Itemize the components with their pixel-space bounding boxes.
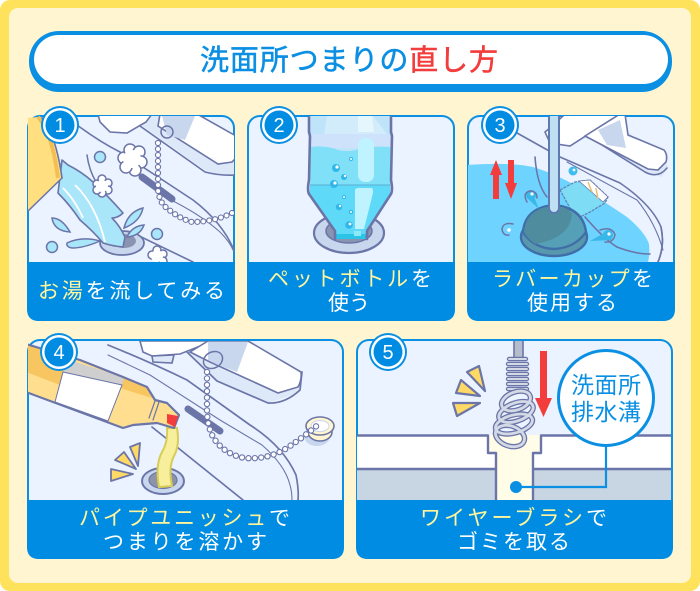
down arrow (535, 351, 552, 417)
caption text: ラバーカップを (492, 268, 653, 291)
caption band (27, 500, 344, 559)
caption band (467, 262, 675, 321)
badge 3: 3 (494, 115, 506, 137)
caption band (27, 262, 235, 321)
panel 1: pour hot water (27, 114, 236, 321)
caption text: つまりを溶かす (103, 531, 267, 554)
badge 5: 5 (382, 342, 394, 364)
caption text: お湯を流してみる (38, 280, 225, 303)
drain (142, 468, 184, 494)
callout: washbasin drain: 洗面所 (571, 372, 641, 398)
badge 4: 4 (53, 342, 65, 364)
badge 2: 2 (273, 115, 285, 137)
title banner (29, 31, 672, 92)
callout: washbasin drain: 排水溝 (571, 399, 641, 425)
wire brush (492, 340, 536, 451)
spark marks (453, 366, 485, 416)
foam (93, 144, 167, 265)
faucet (140, 341, 302, 403)
water splashes (52, 218, 70, 232)
panel 4: dissolve with pipe cleaner (26, 340, 344, 559)
caption text: ワイヤーブラシで (420, 507, 607, 530)
plug chain (158, 126, 234, 222)
plug (304, 417, 334, 446)
plunger cup (520, 229, 588, 258)
callout: washbasin drain (558, 350, 654, 446)
plug chain (200, 348, 320, 458)
caption text: 使う (328, 292, 370, 315)
badge 4 (40, 333, 78, 371)
bubbles (330, 157, 353, 229)
water drops (94, 152, 106, 162)
badge 5 (369, 333, 407, 371)
faucet (98, 114, 236, 175)
spark marks (111, 443, 140, 481)
basin lines (517, 133, 662, 262)
faucet (545, 114, 668, 177)
overflow slot (142, 177, 172, 199)
badge 1 (41, 106, 79, 144)
plunger handle (549, 110, 559, 213)
caption band (247, 262, 455, 321)
illustration: plunger in basin (467, 110, 668, 262)
drops (568, 166, 578, 176)
bottle (26, 344, 179, 428)
drain (100, 231, 144, 255)
caption band (356, 500, 673, 559)
badge 1: 1 (54, 115, 66, 137)
illustration: bottle in drain (308, 112, 392, 253)
illustration: basin with water being poured (27, 114, 236, 265)
title text: 洗面所つまりの直し方 (200, 44, 498, 77)
illustration: drain cross-section (357, 340, 672, 500)
water (467, 164, 649, 262)
yellow container (27, 117, 62, 212)
caption text (420, 507, 607, 554)
overflow slot (188, 409, 220, 431)
poured water (58, 160, 125, 247)
caption text (492, 268, 653, 315)
caption text: ゴミを取る (457, 531, 570, 554)
panel 2: use a plastic bottle (247, 112, 455, 321)
badge 2 (260, 106, 298, 144)
up and down arrows (490, 160, 517, 199)
panel 5: remove debris with wire brush (356, 340, 673, 559)
caption text: パイプユニッシュで (79, 507, 290, 530)
badge 3 (481, 106, 519, 144)
liquid stream (158, 428, 178, 487)
caption text (79, 507, 290, 554)
illustration: cleaner poured in drain (26, 341, 334, 500)
panel 3: use a plunger (467, 110, 675, 321)
leader line (522, 446, 608, 488)
debris (560, 180, 608, 217)
caption text: 使用する (527, 292, 617, 315)
caption text (268, 268, 432, 315)
caption text: ペットボトルを (268, 268, 432, 291)
